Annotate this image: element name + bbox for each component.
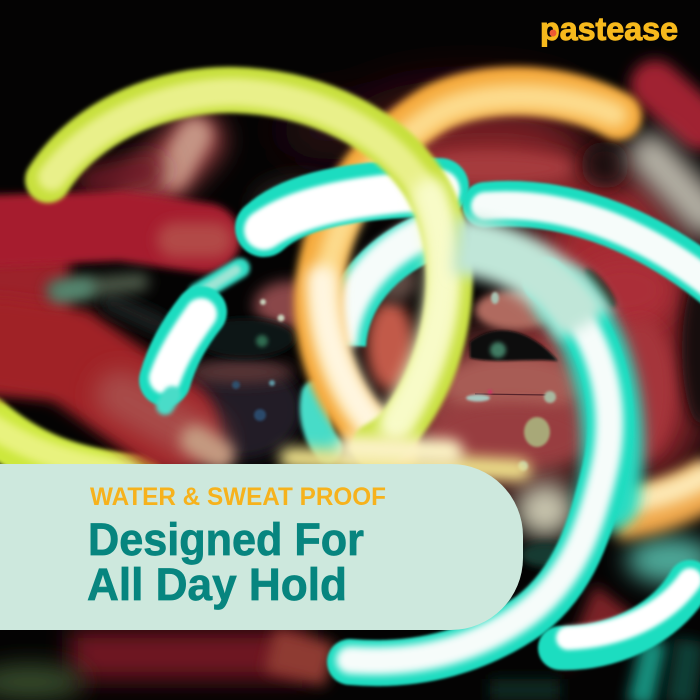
heading: All Day Hold (87, 559, 347, 610)
sequins (232, 292, 556, 471)
logo: pastease: pastease (540, 11, 678, 47)
panel: caption (0, 464, 523, 630)
teal top ring (165, 187, 700, 406)
face details (178, 141, 700, 467)
heading (87, 514, 364, 610)
teal inner ring left arc (315, 226, 440, 448)
eyes (195, 318, 558, 395)
eyebrow: water and sweat proof: WATER & SWEAT PROOF (90, 483, 386, 511)
lower background glow (0, 470, 700, 700)
face skin (280, 80, 700, 485)
teal big arc and bottom sweep (350, 245, 690, 663)
fingers (0, 85, 700, 455)
orange ring (318, 91, 618, 450)
yellow-green ring (48, 90, 520, 470)
yellow-green ring lower-left piece (0, 420, 140, 480)
heading: Designed For (88, 514, 364, 565)
